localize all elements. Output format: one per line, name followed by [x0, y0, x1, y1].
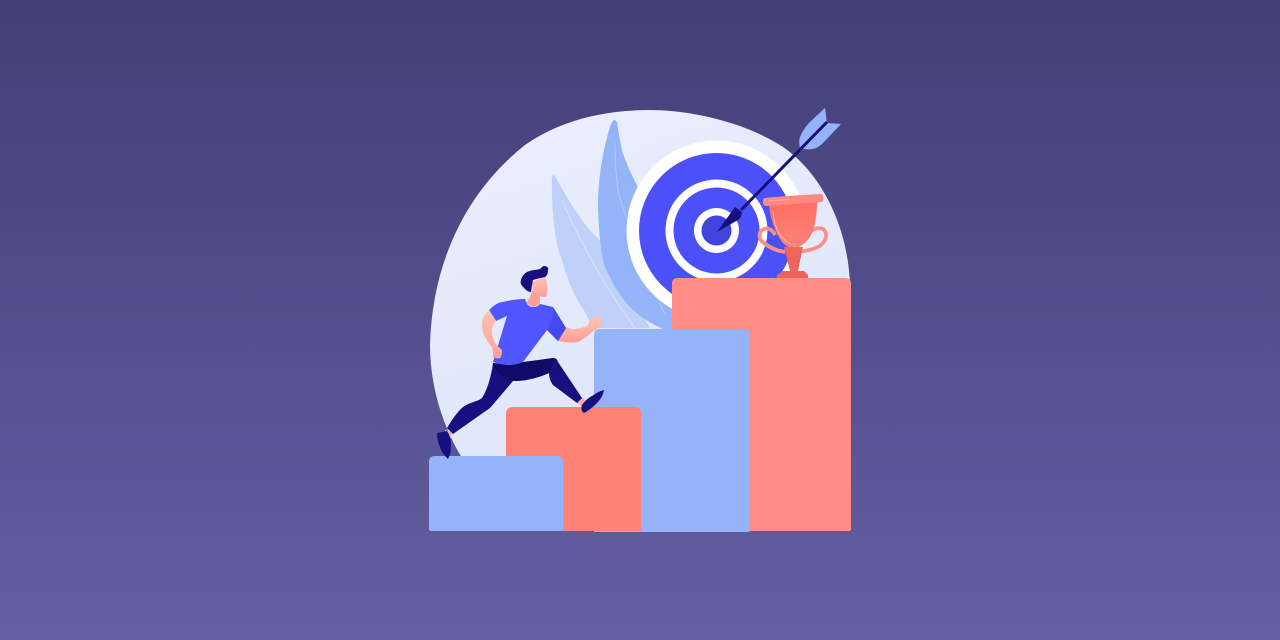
trophy rim	[763, 194, 823, 206]
target: concentric rings	[626, 140, 806, 320]
rear leg	[447, 363, 513, 434]
pants shade	[493, 358, 553, 381]
trophy stem	[784, 247, 803, 271]
step 1: blue block	[429, 456, 563, 531]
trophy handles	[760, 228, 826, 252]
step 2: coral block	[506, 407, 641, 531]
hair	[521, 266, 548, 292]
leaf: pale left	[552, 175, 650, 328]
sleeve shading	[547, 307, 566, 341]
trophy cup	[769, 202, 817, 248]
trophy base	[777, 271, 808, 278]
forward arm	[558, 316, 602, 343]
face	[532, 277, 547, 297]
runner	[437, 266, 604, 459]
neck	[526, 290, 540, 307]
step 4: tall coral block	[672, 278, 851, 531]
trophy	[760, 194, 826, 278]
front shoe	[581, 390, 604, 413]
torso shirt	[489, 299, 566, 365]
ankles	[445, 397, 587, 438]
step 3: blue block	[594, 329, 750, 532]
leaf: blue right	[598, 120, 690, 330]
back arm	[482, 310, 502, 358]
background blob	[430, 110, 850, 458]
rear shoe	[437, 431, 451, 459]
arrow stuck in target	[717, 108, 841, 232]
front leg	[510, 358, 582, 403]
